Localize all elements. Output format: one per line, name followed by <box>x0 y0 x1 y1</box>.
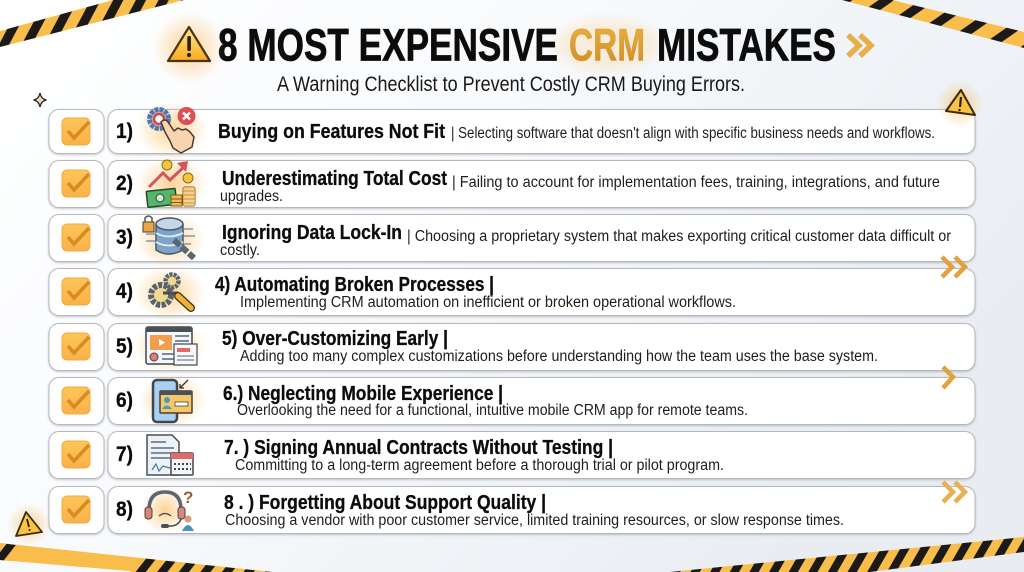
text 3: | Choosing a proprietary system that makes exporting critical customer data difficult or <box>407 228 951 245</box>
icon: gear and hand <box>136 102 208 158</box>
text 6 <box>223 383 748 419</box>
text 7: Committing to a long-term agreement before a thorough trial or pilot program. <box>235 457 724 474</box>
row 4 <box>49 266 975 320</box>
text 4: 4) Automating Broken Processes | <box>215 274 494 296</box>
text 3: Ignoring Data Lock-In <box>222 222 402 244</box>
subtitle: A Warning Checklist to Prevent Costly CRM Buying Errors. <box>277 73 745 96</box>
checkbox 7 <box>49 432 104 478</box>
text 7: 7. ) Signing Annual Contracts Without Testing | <box>224 437 613 459</box>
row 6 <box>49 373 975 427</box>
text 4 <box>215 274 736 311</box>
number 7: 7) <box>116 443 133 466</box>
number 5: 5) <box>116 335 133 358</box>
checkbox 6 <box>49 378 104 424</box>
icon: support headset <box>141 486 194 534</box>
text 1 <box>218 121 935 143</box>
icon: chevrons row 7-8 <box>943 482 965 502</box>
text 7 <box>224 437 724 474</box>
row 3 <box>49 213 975 267</box>
card 1 <box>108 110 975 154</box>
text 6: Overlooking the need for a functional, intuitive mobile CRM app for remote teams. <box>237 402 748 419</box>
title <box>218 19 836 71</box>
icon: database lock and chain <box>134 213 206 267</box>
card 7 <box>108 432 975 478</box>
card 4 <box>108 268 975 316</box>
icon: warning triangle bottom left <box>8 504 50 546</box>
row 5 <box>49 319 975 373</box>
card 8 <box>108 486 975 534</box>
text 3 <box>220 222 951 259</box>
icon: money and rising arrow <box>136 156 208 212</box>
text 2: | Failing to account for implementation fees, training, integrations, and future <box>452 174 940 191</box>
text 2: upgrades. <box>220 188 283 205</box>
caution tape: top left <box>0 0 184 47</box>
card 3 <box>108 214 975 262</box>
icon: chevron row 5-6 <box>943 367 953 388</box>
caution tape: bottom right <box>670 537 1024 572</box>
title: CRM <box>569 20 645 70</box>
icon: contract and calendar <box>147 435 193 475</box>
text 2 <box>220 168 940 205</box>
checkbox 3 <box>49 214 104 262</box>
number 6: 6) <box>116 389 133 412</box>
text 1: | Selecting software that doesn't align with specific business needs and workflows. <box>451 125 935 142</box>
row 1 <box>49 102 975 158</box>
caution tape: top right <box>842 0 1024 48</box>
number 1: 1) <box>116 120 133 143</box>
icon: broken gears and wrench <box>134 266 206 320</box>
checkbox 4 <box>49 268 104 316</box>
text 2: Underestimating Total Cost <box>222 168 447 190</box>
row 2 <box>49 156 975 212</box>
icon: support headset: ? <box>183 488 193 507</box>
icon: web page layout <box>134 319 206 373</box>
icon: title chevrons <box>848 35 871 56</box>
row 8 <box>49 486 975 534</box>
text 5: 5) Over-Customizing Early | <box>222 328 448 350</box>
icon: warning triangle on first card <box>937 81 983 127</box>
text 4: Implementing CRM automation on inefficient or broken operational workflows. <box>240 294 736 311</box>
icon: sparkle <box>34 93 46 107</box>
text 8: Choosing a vendor with poor customer service, limited training resources, or slow response times. <box>225 512 844 529</box>
text 1: Buying on Features Not Fit <box>218 121 445 143</box>
card 6 <box>108 378 975 424</box>
checkbox 2 <box>49 160 104 208</box>
title: MISTAKES <box>657 20 836 70</box>
text 3: costly. <box>220 242 260 259</box>
number 2: 2) <box>116 172 133 195</box>
text 6: 6.) Neglecting Mobile Experience | <box>223 383 503 405</box>
checkbox 8 <box>49 486 104 534</box>
card 5 <box>108 324 975 370</box>
checkbox 1 <box>49 110 104 154</box>
caution tape: bottom left <box>0 543 272 572</box>
checkbox 5 <box>49 324 104 370</box>
row 7 <box>49 432 975 478</box>
number 4: 4) <box>116 280 133 303</box>
icon: phone with CRM card <box>138 373 206 427</box>
icon: chevrons row 3-4 <box>942 257 965 277</box>
card 2 <box>108 160 975 208</box>
text 8 <box>224 492 844 529</box>
number 3: 3) <box>116 226 133 249</box>
number 8: 8) <box>116 498 133 521</box>
title: 8 MOST EXPENSIVE <box>218 20 558 70</box>
text 8: 8 . ) Forgetting About Support Quality | <box>224 492 546 514</box>
text 5 <box>222 328 878 365</box>
text 5: Adding too many complex customizations before understanding how the team uses the base system. <box>240 348 878 365</box>
icon: title warning triangle <box>153 12 225 84</box>
